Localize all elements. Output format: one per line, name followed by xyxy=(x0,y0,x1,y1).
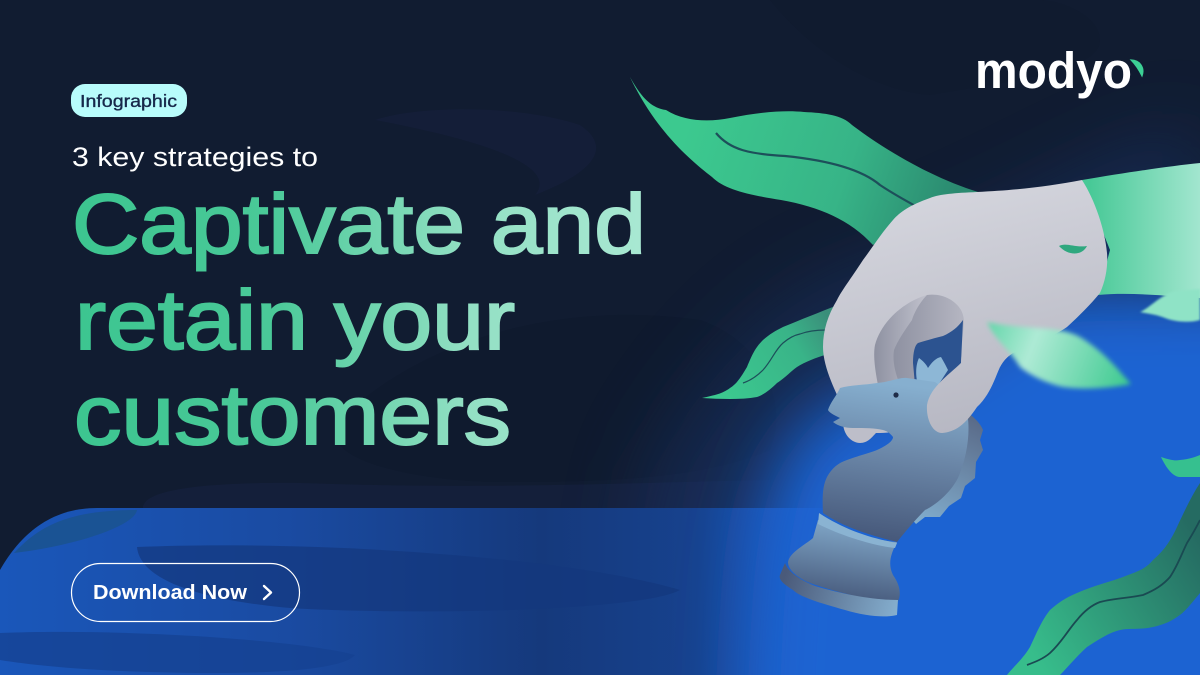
dark streak low xyxy=(0,632,355,673)
leaf: small right edge xyxy=(1161,455,1200,477)
sleeve xyxy=(1082,163,1200,298)
knight collar xyxy=(818,513,897,548)
headline: Captivate and xyxy=(72,177,646,271)
finger tip behind knight xyxy=(843,415,894,443)
button: Download Now: Download Now xyxy=(93,582,247,604)
leaf: left xyxy=(702,305,838,399)
tag: Infographic xyxy=(71,84,187,117)
knight base xyxy=(788,520,900,603)
knight eye xyxy=(893,392,899,398)
dark corner patch xyxy=(14,510,137,553)
icon: chevron xyxy=(264,586,271,599)
navy halo xyxy=(620,130,1200,675)
hand xyxy=(823,180,1107,400)
subtitle: 3 key strategies to xyxy=(72,142,318,172)
headline: retain your xyxy=(75,273,515,367)
logo wordmark: modyo xyxy=(975,42,1132,99)
headline: customers xyxy=(74,368,511,462)
leaf: top xyxy=(630,77,985,245)
finger shade inner xyxy=(893,295,964,385)
flying leaf large xyxy=(987,322,1131,388)
blue glow right xyxy=(625,165,1200,675)
dark streak xyxy=(137,545,680,611)
hand body xyxy=(823,180,1107,400)
flying leaf right edge xyxy=(1140,289,1200,322)
hand small leaf mark xyxy=(1059,245,1087,254)
knight ears xyxy=(916,357,948,390)
headline xyxy=(72,177,646,462)
tag: Infographic: Infographic xyxy=(80,91,177,111)
button: Download Now xyxy=(72,564,300,622)
knight xyxy=(780,357,969,616)
knight mane xyxy=(905,410,983,524)
logo accent xyxy=(1131,60,1143,76)
finger shade outer xyxy=(874,295,945,385)
leaf: bottom right xyxy=(1007,483,1200,675)
blue ground bottom xyxy=(0,508,830,675)
hand opening xyxy=(913,320,963,388)
knight foot xyxy=(780,563,898,616)
knight head and body xyxy=(823,378,969,542)
logo xyxy=(975,42,1143,99)
thumb xyxy=(927,310,1040,433)
